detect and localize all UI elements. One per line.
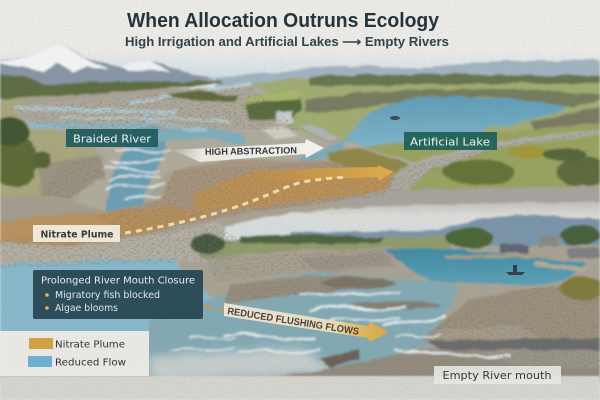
lower lake [385,249,585,284]
label: nitrate plume: Nitrate Plume [40,230,114,240]
bottom paper band [0,376,600,400]
label: empty river mouth: Empty River mouth [442,370,552,382]
left tree line [0,74,225,100]
embankment foot [320,186,600,204]
braided river gravel plain [8,84,330,215]
lower fields [200,236,450,258]
legend: reduced flow: Reduced Flow [55,358,126,368]
reduced flushing flows arrow [204,303,389,342]
gravel embankment [345,128,600,192]
high abstraction arrow: HIGH ABSTRACTION [205,145,297,157]
distant hills [215,59,600,88]
legend: reduced flow [28,356,126,368]
water foam fade [150,348,340,382]
artificial lake [352,97,570,147]
gravel islands [322,277,394,289]
legend [0,331,149,376]
scene underlay [0,88,600,380]
tree rows [165,90,238,102]
lower gravel right [420,282,600,342]
lower houses [500,244,528,253]
callout heading: Prolonged River Mouth Closure [41,276,195,286]
title: When Allocation Outruns Ecology [127,10,440,32]
legend: nitrate plume [29,338,125,350]
upper channels [15,84,250,208]
mid gray gravel [0,196,110,224]
water base center [150,270,460,378]
high abstraction arrow [172,139,324,162]
olive bank [328,148,408,172]
upper silos [276,111,293,124]
left bank [0,98,100,210]
left trees [0,136,38,188]
label: artificial lake [404,132,497,150]
lower rapids [170,292,510,356]
wet sand [425,338,600,350]
label: nitrate plume [33,225,120,242]
nitrate wash lower [0,205,215,246]
lower gravel bars [205,248,420,282]
nitrate arrow [125,165,393,233]
right shrubs [442,159,514,185]
lake surroundings houses [305,89,600,113]
water base left [0,258,225,335]
gravel stone texture [0,86,600,368]
canal [300,125,360,162]
boats [390,116,525,275]
lower sky [225,202,600,240]
snowy mountains [0,44,215,90]
legend: nitrate plume: Nitrate Plume [55,340,125,350]
reduced flushing flows arrow: REDUCED FLUSHING FLOWS [227,306,360,338]
label: braided river [66,129,158,147]
lower tree clumps [190,234,226,254]
lower hill [290,214,600,245]
nitrate wash upper [190,170,395,212]
lower beach [250,350,600,382]
right meadow [345,122,600,195]
label: artificial lake: Artificial Lake [410,136,490,148]
central gravel plain [95,160,395,235]
subtitle: High Irrigation and Artificial Lakes ⟶ Empty Rivers [125,34,449,49]
callout: prolonged river mouth closure [33,270,203,319]
bullet: algae: Algae blooms [55,303,118,314]
label: empty river mouth [434,366,561,384]
bullet: fish: Migratory fish blocked [55,290,160,301]
upper sky [0,50,600,86]
label: braided river: Braided River [73,134,152,146]
upper far trees and fields [215,76,600,140]
